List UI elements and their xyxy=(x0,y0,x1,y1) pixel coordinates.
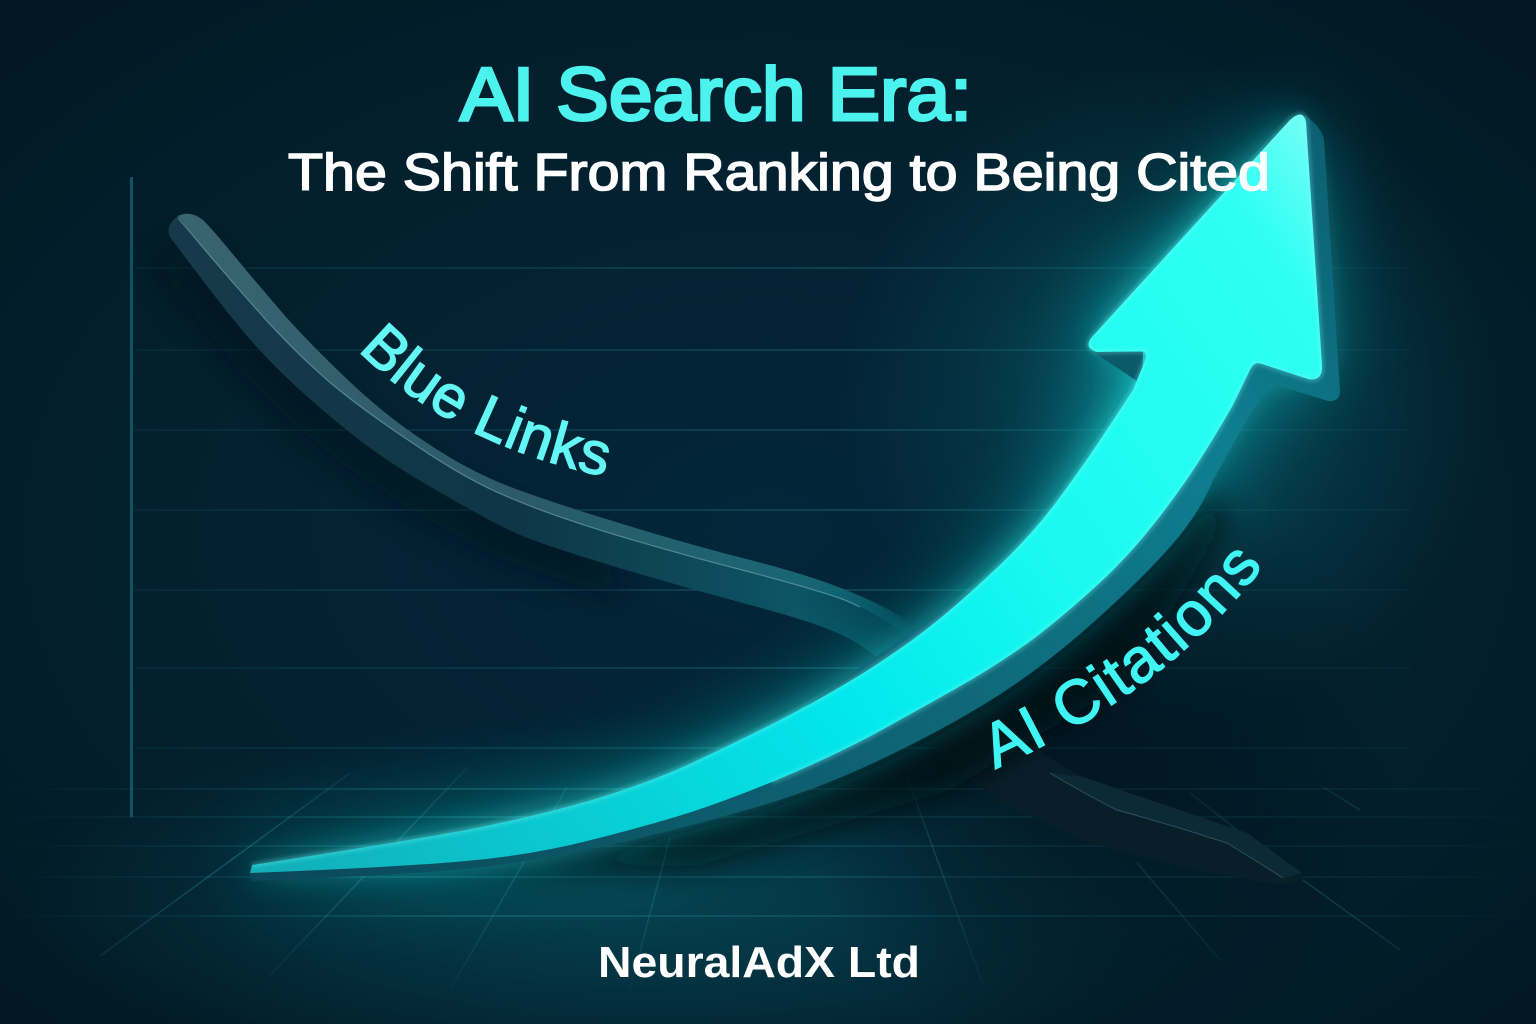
chart grid lines xyxy=(0,268,1536,990)
title: AI Search Era: xyxy=(460,52,972,136)
arrow rim light xyxy=(252,114,1322,865)
arrow top face xyxy=(250,114,1322,873)
company name: NeuralAdX Ltd xyxy=(598,938,920,987)
subtitle: The Shift From Ranking to Being Cited xyxy=(288,144,1270,202)
ribbon lower segment xyxy=(925,700,1302,884)
arrow: AI citations rising xyxy=(250,113,1340,881)
ribbon shadow xyxy=(156,246,626,598)
arrow drop shadow xyxy=(420,490,1225,880)
ribbon upper segment top face xyxy=(178,214,990,690)
dark pool under the arrow xyxy=(800,470,1400,1024)
AI citations label: AI Citations xyxy=(992,550,1260,770)
ribbon lower top face xyxy=(1050,773,1302,878)
blue links label: Blue Links xyxy=(360,322,609,475)
ribbon upper segment underside xyxy=(169,214,990,730)
arrow outer glow xyxy=(250,113,1322,873)
ribbon lower highlight xyxy=(1050,773,1283,878)
vertical axis xyxy=(130,177,133,817)
arrow 3D side xyxy=(250,115,1340,881)
ribbon highlight line xyxy=(178,218,860,607)
curve: blue links declining ribbon xyxy=(156,214,1302,884)
